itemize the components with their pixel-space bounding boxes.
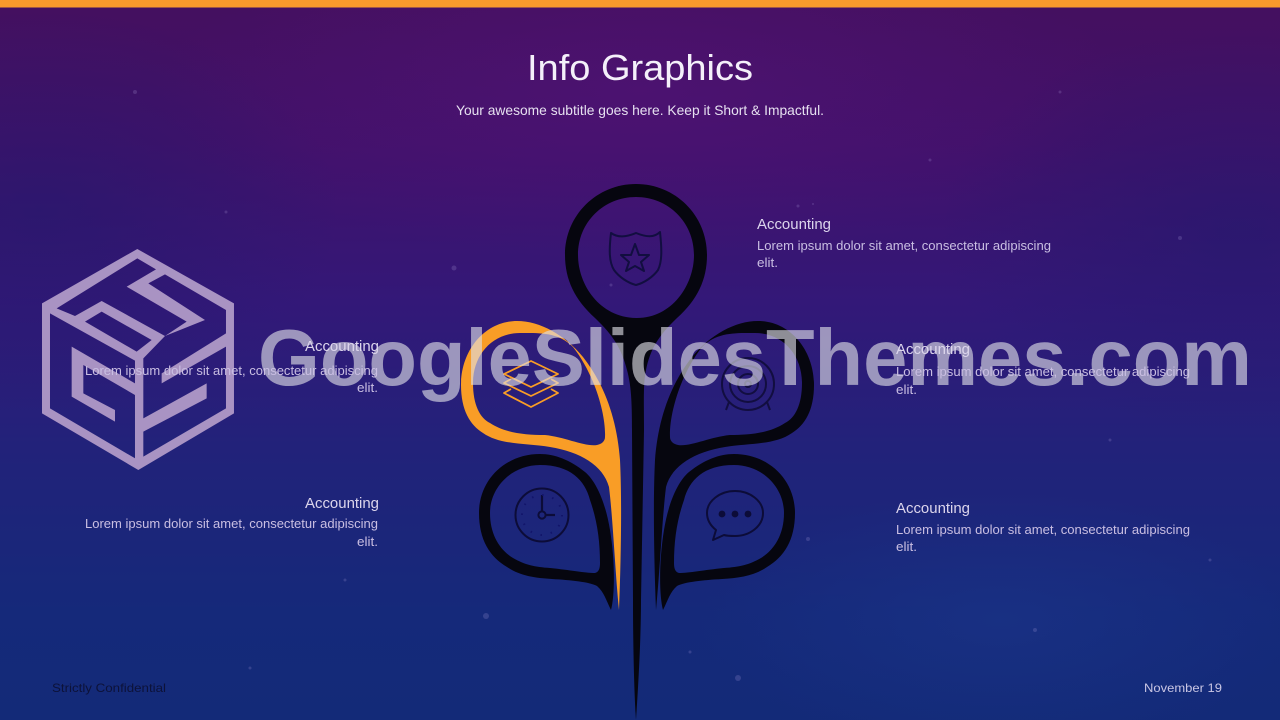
text block: middle left: Accounting xyxy=(305,339,379,355)
icon: clock xyxy=(516,488,568,542)
footer: confidential: Strictly Confidential xyxy=(52,681,166,695)
text block: lower left: Lorem ipsum dolor sit amet, consectetur adipiscing xyxy=(85,517,378,531)
text block: lower left xyxy=(85,496,379,549)
icon: shield with star xyxy=(610,232,661,285)
tree diagram xyxy=(461,184,814,720)
top orange bar xyxy=(0,0,1280,8)
text block: middle left: elit. xyxy=(357,381,378,395)
text block: middle right: elit. xyxy=(896,383,917,397)
title: Info Graphics xyxy=(527,47,753,88)
watermark logo xyxy=(42,249,234,470)
text block: lower right xyxy=(896,501,1190,554)
text block: top right xyxy=(757,217,1051,270)
subtitle: Your awesome subtitle goes here. Keep it Short & Impactful. xyxy=(456,102,824,118)
text block: lower right: elit. xyxy=(896,540,917,554)
text block: middle right xyxy=(896,342,1190,397)
icon: stacked layers xyxy=(504,361,558,407)
watermark text: GoogleSlidesThemes.com xyxy=(258,313,1252,402)
text block: lower right: Accounting xyxy=(896,501,970,517)
text block: middle left xyxy=(85,339,379,395)
footer: date: November 19 xyxy=(1144,681,1222,695)
icon: chat bubble xyxy=(707,491,763,540)
drop: upper right xyxy=(654,321,814,610)
text block: lower left: elit. xyxy=(357,535,378,549)
text block: middle right: Lorem ipsum dolor sit amet, consectetur adipiscing xyxy=(896,365,1190,379)
icon: target xyxy=(722,358,774,410)
text block: lower left: Accounting xyxy=(305,496,379,512)
drop: top with stem xyxy=(565,184,707,720)
drop: lower right xyxy=(660,454,795,610)
text block: lower right: Lorem ipsum dolor sit amet, consectetur adipiscing xyxy=(896,523,1190,537)
drop: lower left xyxy=(479,454,614,610)
text block: middle left: Lorem ipsum dolor sit amet, consectetur adipiscing xyxy=(85,364,378,378)
text block: top right: Accounting xyxy=(757,217,831,233)
text block: top right: Lorem ipsum dolor sit amet, consectetur adipiscing xyxy=(757,239,1051,253)
text block: middle right: Accounting xyxy=(896,342,970,358)
text block: top right: elit. xyxy=(757,256,778,270)
drop: orange highlighted xyxy=(461,321,621,610)
